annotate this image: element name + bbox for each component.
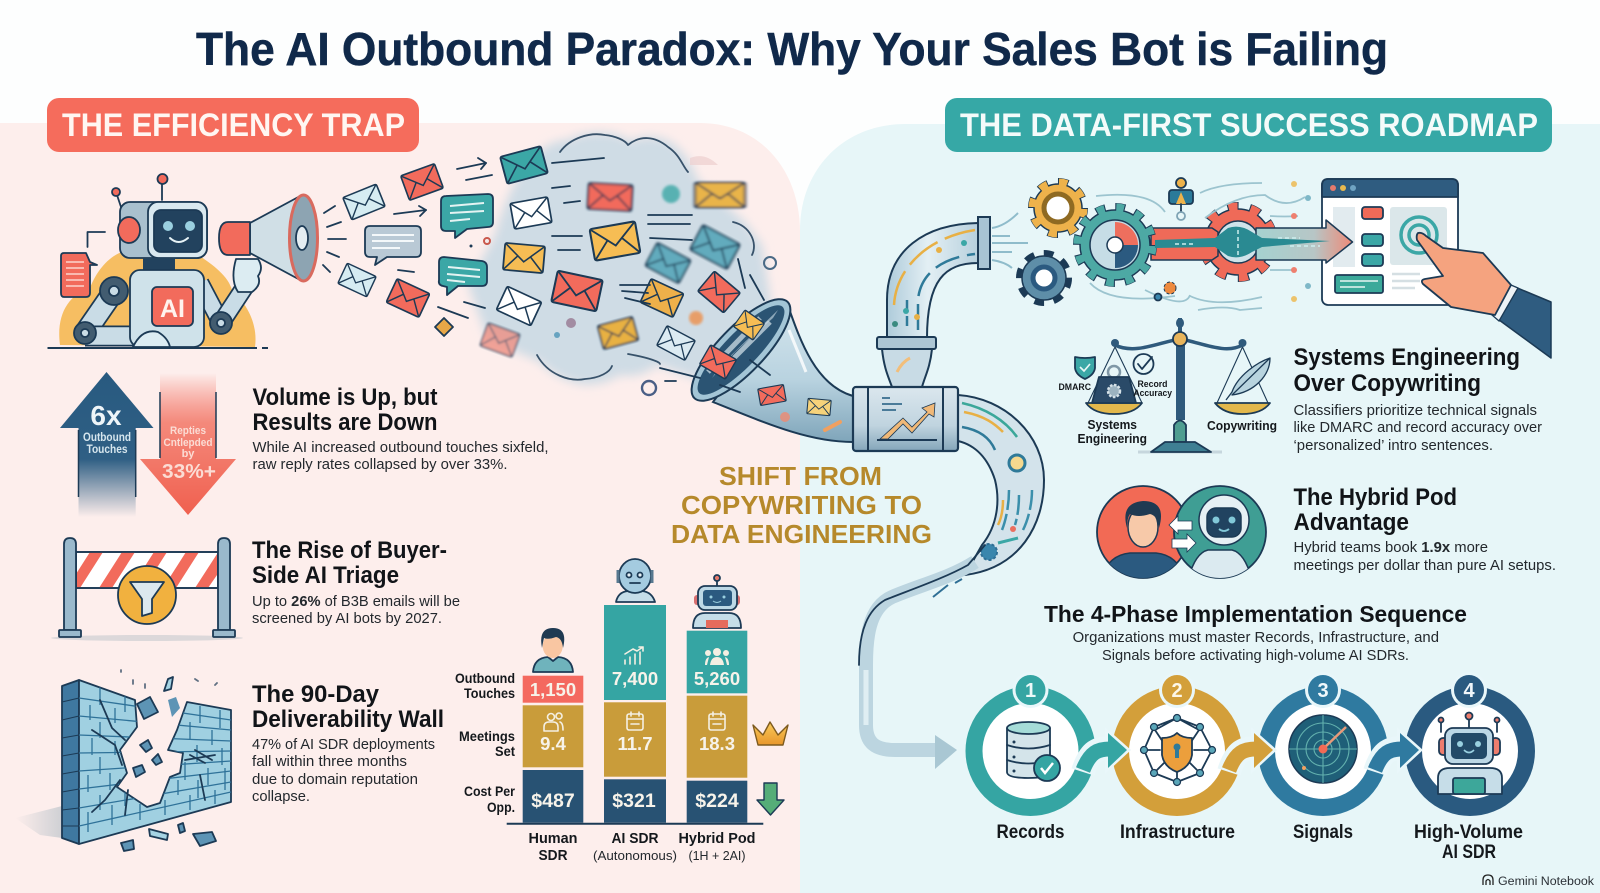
funnel junction box <box>853 387 958 451</box>
column labels: Hybrid Pod <box>678 830 756 847</box>
text block: volume is up: raw reply rates collapsed by over 33%. <box>252 456 508 473</box>
title: The AI Outbound Paradox: Why Your Sales Bot is Failing <box>196 23 1388 75</box>
column: hybrid pod <box>687 631 747 823</box>
column: human SDR: $487 <box>531 790 575 812</box>
text block: systems engineering: Over Copywriting <box>1294 370 1481 397</box>
text block: 4-phase implementation heading: Signals before activating high-volume AI SDRs. <box>1102 647 1409 664</box>
column labels: AI SDR <box>612 830 659 847</box>
icon: gold gear <box>1033 183 1083 233</box>
icon: road barrier with funnel <box>51 538 243 641</box>
up arrow: outbound touches <box>60 372 154 517</box>
callout: shift from copywriting to data engineering: SHIFT FROM <box>719 461 882 491</box>
watermark: Gemini Notebook: Gemini Notebook <box>1498 876 1594 888</box>
icon: teal gear <box>1079 209 1151 281</box>
phase 1: records <box>974 672 1087 843</box>
heading badge: the efficiency trap <box>47 98 419 152</box>
column: AI SDR: $321 <box>612 790 656 812</box>
phase 3: signals: 3 <box>1317 680 1329 702</box>
arrow: phase 3 to 4 <box>1375 727 1423 774</box>
text block: 90-day deliverability wall: fall within three months <box>252 753 407 770</box>
row labels: Touches <box>464 685 515 701</box>
column labels: (Autonomous) <box>593 849 677 863</box>
up arrow: outbound touches: Outbound <box>83 432 131 444</box>
icon: operator badge <box>1169 178 1193 220</box>
browser dashboard <box>1322 179 1458 305</box>
scale labels: Systems <box>1088 418 1137 432</box>
phase 2: infrastructure: 2 <box>1171 680 1183 702</box>
illustration: robot with megaphone: AI <box>160 295 185 323</box>
text block: 90-day deliverability wall: 47% of AI SDR deployments <box>252 736 435 753</box>
illustration: flying emails and messages <box>338 146 831 416</box>
scale labels <box>1058 379 1277 446</box>
icon: human and robot hybrid pod <box>1097 486 1266 580</box>
scale labels: Engineering <box>1078 432 1147 446</box>
text block: volume is up: Volume is Up, but <box>252 384 438 411</box>
phase 3: signals: Signals <box>1293 822 1353 843</box>
icon: red gear <box>1204 208 1272 276</box>
illustration: funnel intake <box>678 286 853 442</box>
text block: 90-day deliverability wall: collapse. <box>252 788 310 805</box>
text block: hybrid pod advantage <box>1294 484 1556 574</box>
text block: 90-day deliverability wall: The 90-Day <box>252 681 380 708</box>
phase 4: high-volume AI SDR: High-Volume <box>1414 822 1523 843</box>
stat arrows <box>60 372 236 517</box>
panel: efficiency trap background <box>0 123 800 893</box>
text block: 4-phase implementation heading <box>1044 601 1467 664</box>
illustration: email cloud <box>468 133 772 385</box>
text block: buyer-side AI triage: The Rise of Buyer- <box>252 537 447 564</box>
connector neck <box>877 337 936 390</box>
text block: 90-day deliverability wall: due to domain reputation <box>252 771 418 788</box>
text block: 4-phase implementation heading: Organizations must master Records, Infrastructure, and <box>1073 629 1439 646</box>
down arrow: replies collapsed: Repties <box>170 425 206 437</box>
heading badge: data-first success roadmap: THE DATA-FIRST SUCCESS ROADMAP <box>960 107 1538 143</box>
column: AI SDR: 7,400 <box>612 668 658 689</box>
icon: cracked brick wall <box>15 670 231 851</box>
column: hybrid pod: $224 <box>695 790 739 812</box>
icon: green down arrow <box>757 783 784 815</box>
column: human SDR: 9.4 <box>540 733 567 754</box>
row labels: Cost Per <box>464 783 515 799</box>
row labels: Meetings <box>459 728 515 744</box>
heading badge: the efficiency trap: THE EFFICIENCY TRAP <box>62 107 405 143</box>
text block: volume is up: Results are Down <box>252 409 438 436</box>
small process details <box>1090 181 1311 310</box>
column: human SDR <box>523 676 583 823</box>
text block: 90-day deliverability wall <box>252 681 444 805</box>
text block: hybrid pod advantage: meetings per dollar than pure AI setups. <box>1294 557 1556 574</box>
column labels: Human <box>528 830 578 847</box>
chart axis <box>507 823 763 825</box>
callout: shift from copywriting to data engineering <box>671 461 932 549</box>
row labels: Opp. <box>487 799 515 815</box>
process: 4-phase rings <box>974 672 1526 863</box>
phase 4: high-volume AI SDR: 4 <box>1463 680 1475 702</box>
phase 3: signals <box>1266 672 1380 843</box>
column labels: (1H + 2AI) <box>688 849 746 863</box>
column: AI SDR <box>604 605 666 823</box>
icon: balance scale <box>1058 318 1277 452</box>
text block: buyer-side AI triage: screened by AI bots by 2027. <box>252 610 442 627</box>
icon: AI SDR robot <box>616 559 655 602</box>
text block: hybrid pod advantage: Hybrid teams book 1.9x more <box>1294 539 1488 556</box>
text block: buyer-side AI triage <box>252 537 460 627</box>
stacked bar chart: human vs AI vs hybrid <box>455 559 788 864</box>
text block: hybrid pod advantage: Advantage <box>1294 509 1409 536</box>
icon: small blue gear <box>1021 255 1067 301</box>
illustration: robot with megaphone <box>48 174 346 348</box>
column: hybrid pod: 18.3 <box>699 733 735 754</box>
icon: crown <box>753 722 788 745</box>
phase 1: records: 1 <box>1025 680 1036 702</box>
text block: volume is up <box>252 384 548 473</box>
down arrow: replies collapsed: by <box>182 448 195 460</box>
row labels: Outbound <box>455 670 515 686</box>
down arrow: replies collapsed <box>140 373 236 515</box>
icon: hybrid pod robot <box>693 575 741 628</box>
heading badge: data-first success roadmap <box>945 98 1552 152</box>
callout: shift from copywriting to data engineering: COPYWRITING TO <box>681 490 922 520</box>
upper pipe <box>887 213 1028 338</box>
column labels: SDR <box>538 847 568 864</box>
row labels <box>455 670 515 815</box>
text block: hybrid pod advantage: The Hybrid Pod <box>1294 484 1457 511</box>
pipe tail and arrow <box>859 545 985 769</box>
phase 1: records: Records <box>996 822 1064 843</box>
row labels: Set <box>495 743 515 759</box>
text block: 90-day deliverability wall: Deliverability Wall <box>252 706 444 733</box>
scale labels: Record <box>1138 379 1168 390</box>
icon: hand pressing dashboard <box>1417 233 1551 358</box>
phase 2: infrastructure: Infrastructure <box>1120 822 1235 843</box>
phase 4: high-volume AI SDR <box>1414 672 1526 863</box>
callout: shift from copywriting to data engineering: DATA ENGINEERING <box>671 519 932 549</box>
left data band <box>1151 228 1218 260</box>
panel: success roadmap background <box>800 124 1600 893</box>
right pipe <box>958 395 1044 575</box>
arrow: phase 1 to 2 <box>1083 727 1131 774</box>
column: human SDR: 1,150 <box>530 679 576 700</box>
text block: 4-phase implementation heading: The 4-Phase Implementation Sequence <box>1044 601 1467 627</box>
arrow: phase 2 to 3 <box>1229 727 1277 774</box>
data arrow into dashboard <box>1155 220 1352 263</box>
text block: buyer-side AI triage: Side AI Triage <box>252 562 399 589</box>
column: hybrid pod: 5,260 <box>694 668 740 689</box>
scale labels: DMARC <box>1058 382 1091 393</box>
text block: systems engineering <box>1294 344 1542 454</box>
up arrow: outbound touches: Touches <box>86 444 128 456</box>
phase 4: high-volume AI SDR: AI SDR <box>1442 842 1496 863</box>
scale labels: Accuracy <box>1134 388 1173 399</box>
column: AI SDR: 11.7 <box>618 733 652 754</box>
up arrow: outbound touches: 6x <box>90 400 122 431</box>
text block: systems engineering: ‘personalized’ intro sentences. <box>1294 437 1493 454</box>
text block: buyer-side AI triage: Up to 26% of B3B emails will be <box>252 593 460 610</box>
text block: systems engineering: like DMARC and record accuracy over <box>1294 419 1542 436</box>
scale labels: Copywriting <box>1207 419 1277 433</box>
illustration: data pipeline <box>853 213 1044 769</box>
text block: systems engineering: Classifiers prioritize technical signals <box>1294 402 1537 419</box>
text block: volume is up: While AI increased outbound touches sixfeld, <box>252 439 548 456</box>
down arrow: replies collapsed: 33%+ <box>162 461 216 483</box>
down arrow: replies collapsed: Cntlepded <box>164 437 212 449</box>
illustration: gears and dashboard <box>1021 178 1551 358</box>
phase 2: infrastructure <box>1120 672 1235 843</box>
icon: human rep <box>533 628 573 672</box>
text block: systems engineering: Systems Engineering <box>1294 344 1520 371</box>
column labels <box>528 830 756 864</box>
